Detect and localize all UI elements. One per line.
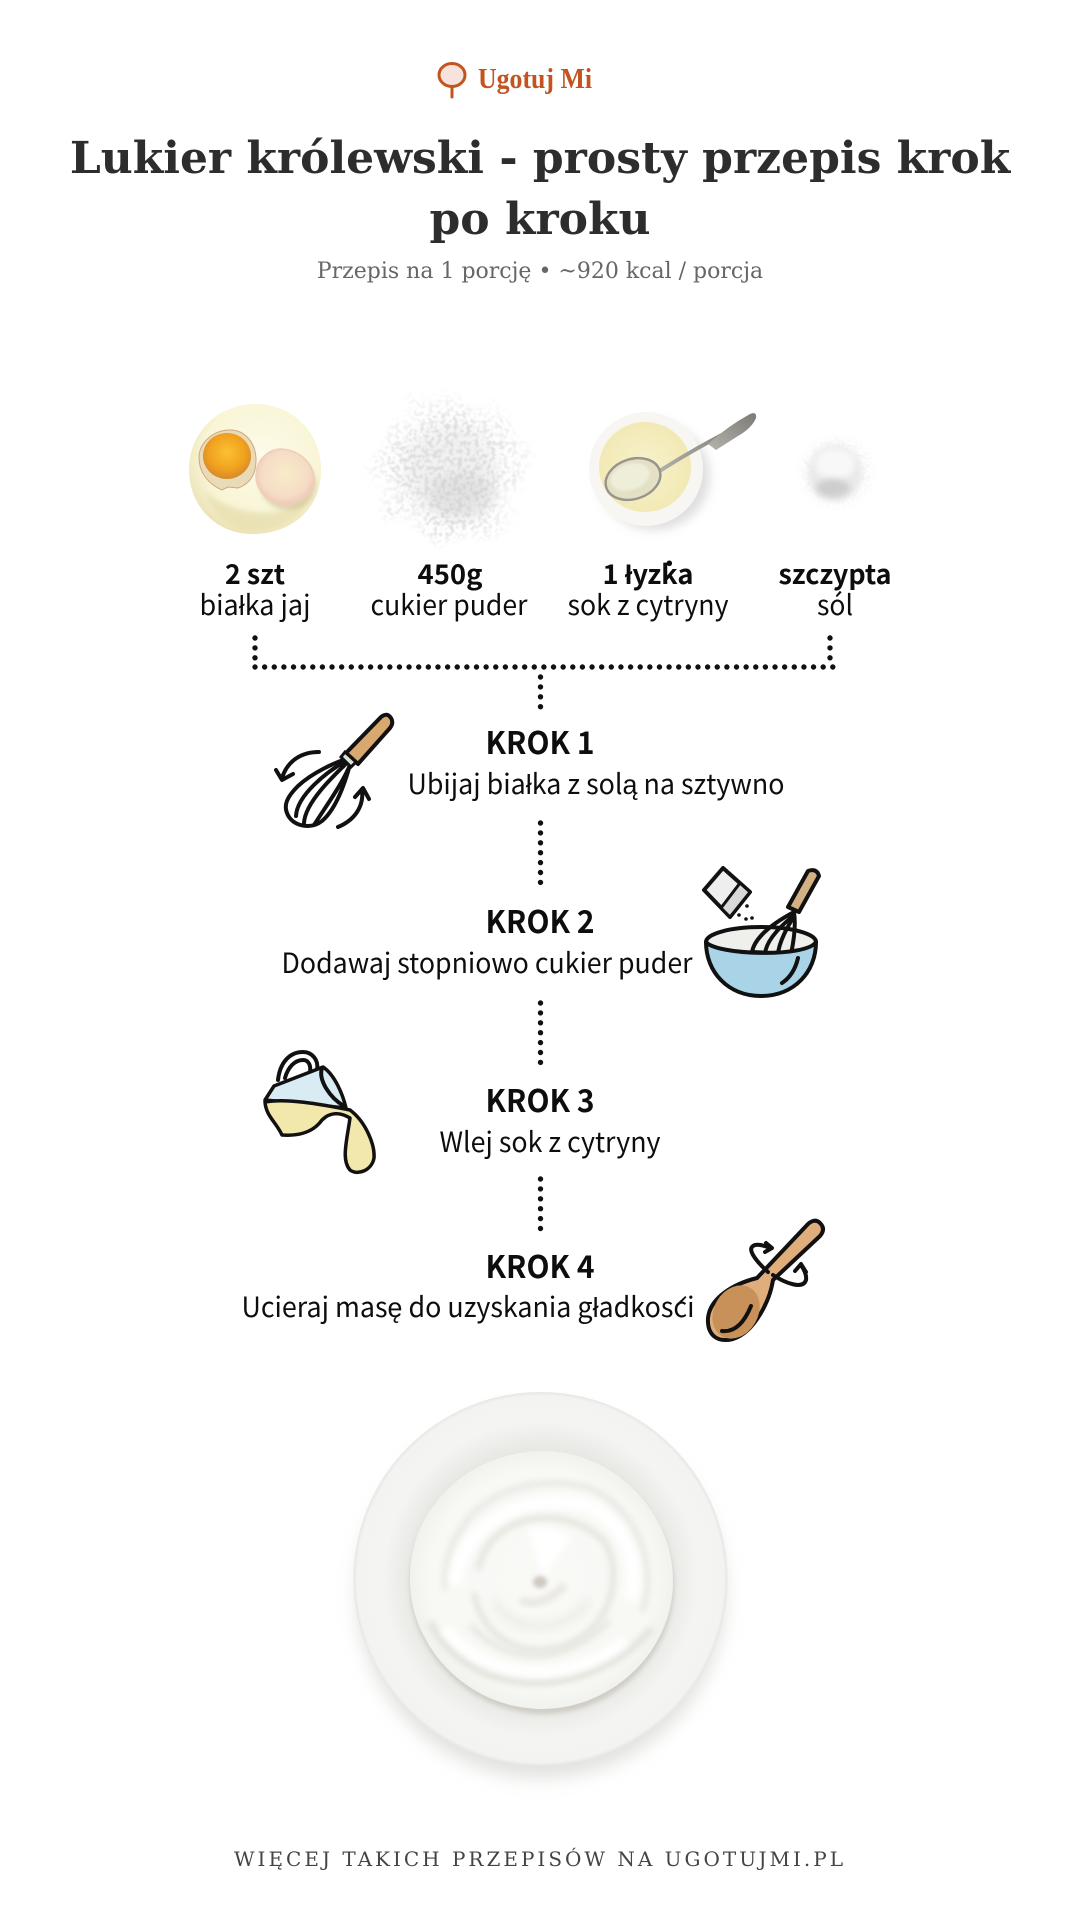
ingredient: powdered sugar [366, 390, 534, 624]
description: Wlej sok z cytryny [440, 1121, 661, 1161]
name: cukier puder [370, 584, 528, 624]
brand name: Ugotuj Mi [478, 63, 592, 95]
name: sok z cytryny [568, 584, 729, 624]
title: Lukier królewski - prosty przepis krok [70, 133, 1012, 184]
name: białka jaj [200, 584, 310, 624]
heading: KROK 1 [486, 718, 594, 763]
subtitle: Przepis na 1 porcję • ~920 kcal / porcja [317, 259, 763, 284]
heading: KROK 3 [486, 1076, 594, 1121]
step 3 [265, 1052, 661, 1172]
amount: 2 szt [225, 553, 285, 592]
plate [354, 1392, 728, 1766]
amount: szczypta [778, 553, 892, 592]
photo: bowl with spoon [589, 412, 756, 530]
ingredient: egg whites [189, 404, 321, 624]
description: Dodawaj stopniowo cukier puder [282, 942, 693, 982]
icon: logo spoon [439, 64, 465, 97]
heading: KROK 4 [486, 1242, 594, 1287]
icon: whisk [276, 715, 392, 827]
amount: 450g [418, 553, 482, 592]
ingredient: salt [778, 432, 892, 624]
icon: wooden spoon [703, 1221, 823, 1347]
icon: pouring jug [265, 1052, 374, 1172]
step 4 [242, 1221, 823, 1347]
description: Ubijaj białka z solą na sztywno [408, 763, 784, 803]
connector: step 2 to 3 [538, 1003, 543, 1063]
step 2 [282, 868, 819, 996]
title: po kroku [430, 194, 650, 245]
photo: sugar pile [366, 390, 534, 550]
connector: step 3 to 4 [538, 1179, 543, 1230]
connector: ingredients bracket [255, 638, 833, 708]
ingredient: lemon juice [568, 412, 756, 624]
plate shadow [357, 1410, 725, 1778]
description: Ucieraj masę do uzyskania gładkości [242, 1286, 694, 1326]
step 1 [276, 715, 784, 827]
heading: KROK 2 [486, 897, 594, 942]
logo: Ugotuj Mi [439, 63, 592, 97]
photo: egg white with shells [189, 404, 321, 534]
icing swirl [410, 1451, 674, 1714]
footer: WIĘCEJ TAKICH PRZEPISÓW NA UGOTUJMI.PL [234, 1846, 846, 1871]
connector: step 1 to 2 [538, 823, 543, 884]
title [70, 133, 1012, 245]
amount: 1 łyżka [602, 553, 694, 592]
name: sól [817, 584, 853, 624]
photo: finished icing on plate [354, 1392, 728, 1778]
photo: salt pile [794, 432, 878, 512]
icon: bowl with whisk and sugar shaker [704, 868, 819, 996]
